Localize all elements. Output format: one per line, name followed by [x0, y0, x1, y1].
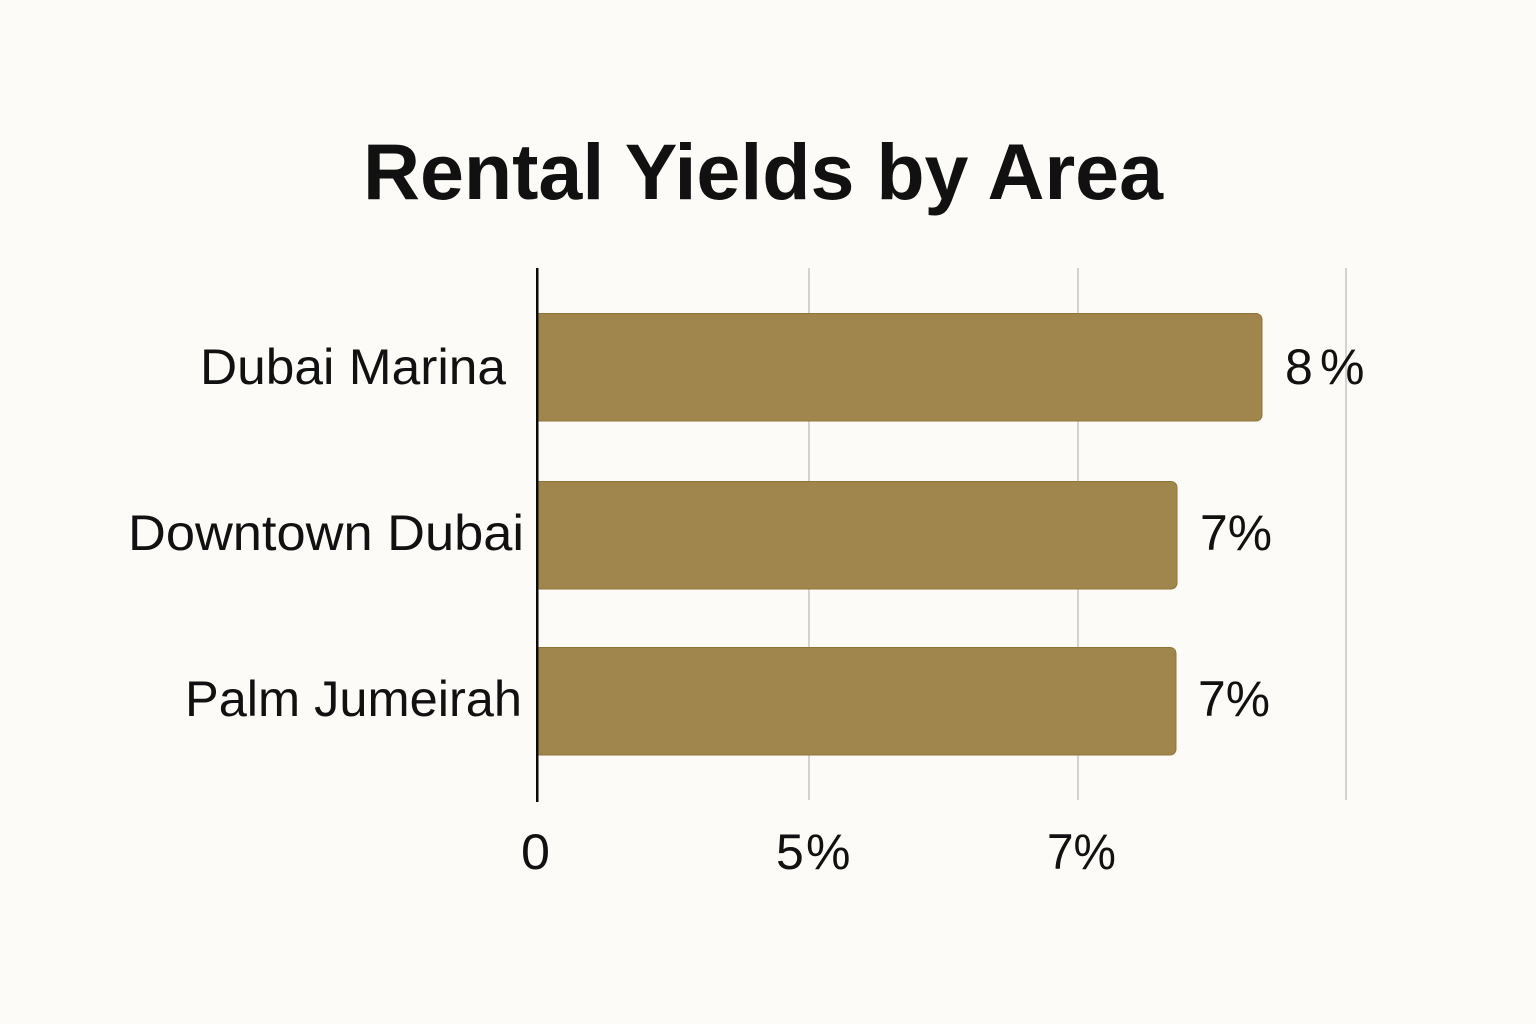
bar: Palm Jumeirah: Palm Jumeirah	[185, 671, 522, 727]
x-axis labels	[521, 824, 1116, 880]
bar: Dubai Marina	[200, 314, 1364, 421]
title: Rental Yields by Area	[363, 127, 1164, 216]
x-axis labels: 7%	[1047, 824, 1116, 880]
bar: Downtown Dubai	[128, 482, 1272, 589]
x-axis labels: 0	[521, 824, 550, 880]
bar: Palm Jumeirah	[185, 648, 1270, 755]
bar: Dubai Marina: 8%	[1285, 339, 1364, 395]
bar: Dubai Marina: Dubai Marina	[200, 339, 506, 395]
bar chart	[128, 268, 1364, 880]
bar: Downtown Dubai: 7%	[1200, 505, 1272, 561]
x-axis labels: 5%	[776, 824, 850, 880]
bar: Palm Jumeirah: 7%	[1198, 671, 1270, 727]
bar: Downtown Dubai: Downtown Dubai	[128, 505, 524, 561]
